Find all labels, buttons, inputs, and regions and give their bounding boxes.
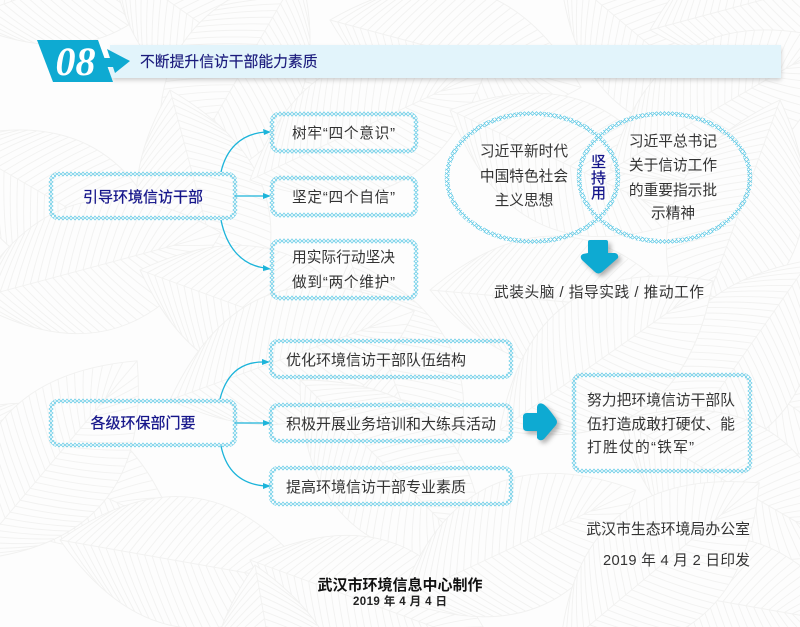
panel: all levels mind map (51, 341, 750, 504)
header title: 不断提升信访干部能力素质 (140, 54, 318, 70)
connector arrows (221, 129, 271, 271)
number badge 08 (37, 39, 113, 84)
header bar (110, 45, 781, 80)
box: four consciousnesses (272, 114, 416, 151)
box: professional quality (271, 468, 511, 504)
box: all levels (51, 401, 235, 445)
box: training (271, 405, 511, 441)
panel: venn diagram (447, 114, 750, 301)
box: goal: 伍打造成敢打硬仗、能 (587, 416, 735, 433)
overlap label: 用 (591, 185, 606, 202)
venn conclusion: 武装头脑 / 指导实践 / 推动工作 (494, 284, 704, 301)
box: two upholds: 做到“两个维护” (292, 274, 395, 291)
box: training: 积极开展业务培训和大练兵活动 (286, 416, 496, 433)
left circle: 主义思想 (495, 192, 553, 209)
overlap label (591, 154, 606, 202)
panel: guide cadres mind map (51, 114, 416, 298)
overlap label: 坚 (591, 154, 606, 171)
number badge 08: 08 (56, 39, 96, 84)
header banner (37, 39, 781, 84)
box: guide cadres (51, 174, 235, 218)
footer credit: 武汉市环境信息中心制作 (317, 576, 483, 594)
right circle: 习近平总书记 (629, 133, 717, 150)
connector arrows (220, 359, 271, 489)
right circle (579, 114, 750, 242)
box: optimise structure (271, 341, 511, 377)
box: goal (574, 375, 750, 471)
issue date: 2019 年 4 月 2 日印发 (603, 552, 750, 569)
box: two upholds (272, 241, 416, 298)
box: guide cadres: 引导环境信访干部 (83, 188, 203, 206)
box: four consciousnesses: 树牢“四个意识” (292, 124, 395, 142)
overlap label: 持 (591, 170, 606, 187)
issuer: 武汉市生态环境局办公室 (586, 520, 750, 538)
box: goal: 努力把环境信访干部队 (587, 391, 735, 409)
icon: right arrow (523, 403, 560, 443)
box: professional quality: 提高环境信访干部专业素质 (286, 478, 466, 496)
left circle: 中国特色社会 (480, 168, 568, 185)
left circle: 习近平新时代 (480, 143, 568, 160)
left circle (447, 114, 618, 242)
box: four confidences: 坚定“四个自信” (292, 189, 395, 206)
box: optimise structure: 优化环境信访干部队伍结构 (286, 351, 466, 369)
box: goal: 打胜仗的“铁军” (587, 439, 694, 456)
footer date: 2019 年 4 月 4 日 (353, 594, 447, 608)
box: two upholds: 用实际行动坚决 (292, 249, 395, 266)
right circle: 示精神 (651, 205, 695, 222)
right circle: 的重要指示批 (629, 182, 717, 199)
box: all levels: 各级环保部门要 (90, 415, 196, 432)
icon: down arrow (581, 240, 621, 276)
icon: header arrow (104, 49, 130, 73)
right circle: 关于信访工作 (629, 157, 717, 174)
box: four confidences (272, 178, 416, 215)
